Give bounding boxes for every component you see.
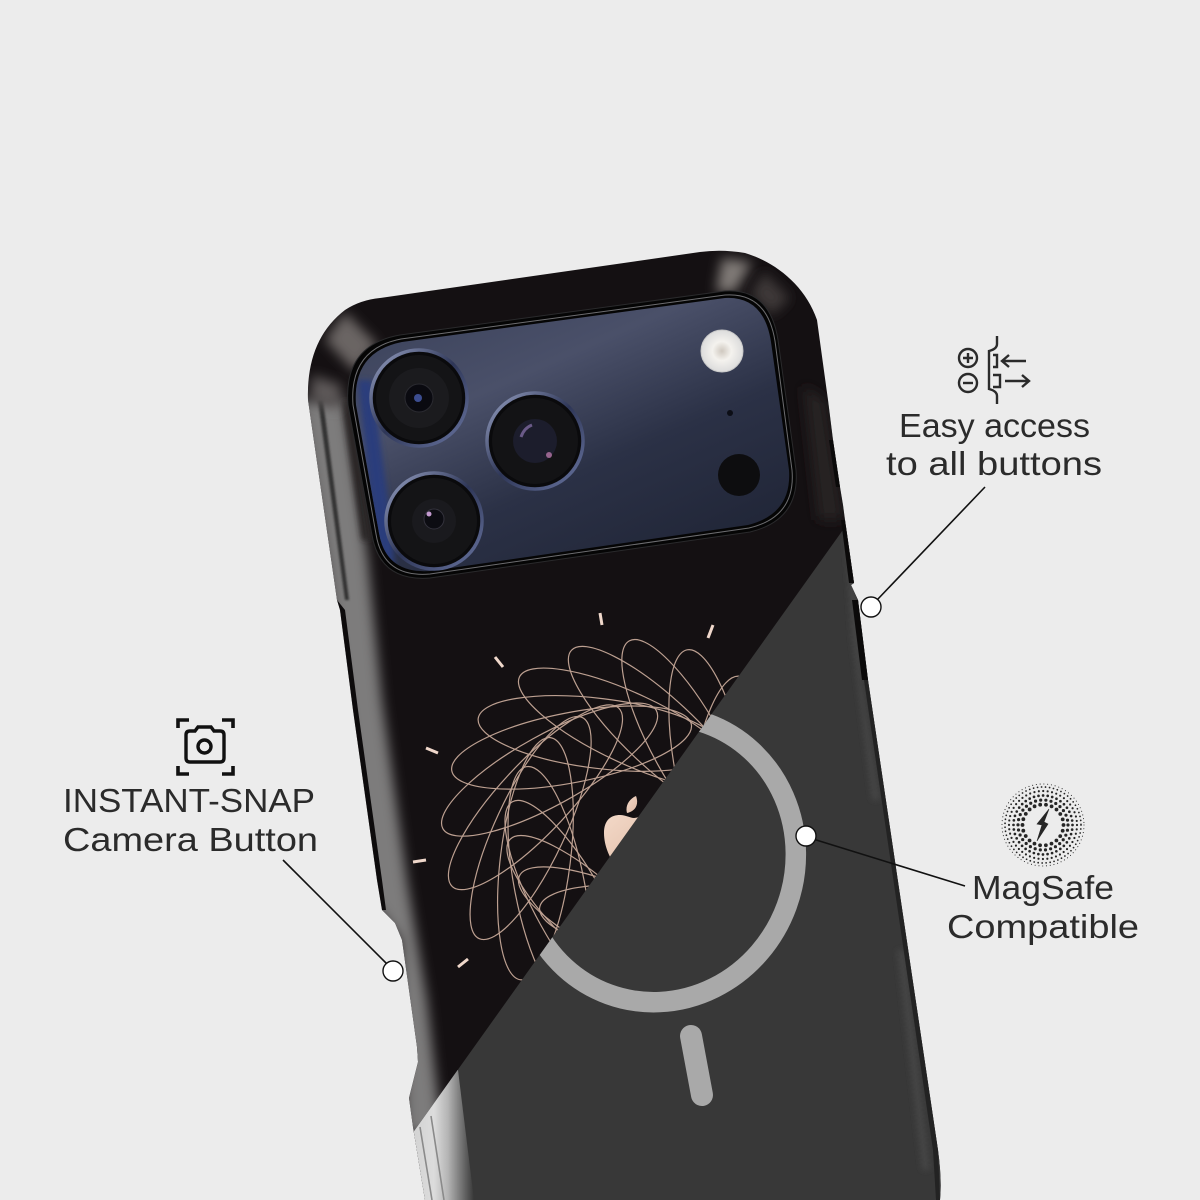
callout line xyxy=(877,487,985,600)
callout: camera button xyxy=(63,720,403,981)
MagSafe ring xyxy=(540,714,806,1012)
label: camera button: INSTANT-SNAP xyxy=(63,782,315,819)
label: camera button xyxy=(63,782,318,858)
label: MagSafe: MagSafe xyxy=(972,869,1114,906)
case body: grey lower section xyxy=(400,520,960,1200)
icon: camera xyxy=(178,720,233,774)
callout: MagSafe xyxy=(796,784,1139,945)
MagSafe alignment pill xyxy=(691,1036,702,1095)
callout line xyxy=(813,839,965,886)
microphone xyxy=(727,410,733,416)
callout dot xyxy=(861,597,881,617)
flash xyxy=(701,330,743,372)
icon: buttons xyxy=(959,336,1029,404)
label: MagSafe: Compatible xyxy=(947,908,1139,945)
lens middle xyxy=(487,393,583,489)
callout dot xyxy=(383,961,403,981)
label: easy access: to all buttons xyxy=(886,445,1102,482)
callout: easy access xyxy=(861,336,1102,617)
spirograph artwork xyxy=(440,638,739,980)
lens bottom xyxy=(386,473,482,569)
apple logo xyxy=(604,796,638,857)
side buttons xyxy=(829,440,868,680)
camera surround xyxy=(348,291,796,578)
phone case xyxy=(290,240,960,1200)
spirograph ticks xyxy=(413,613,713,967)
camera glass xyxy=(356,298,789,571)
label: easy access: Easy access xyxy=(899,407,1090,444)
left blue edge xyxy=(358,380,395,575)
case body: black upper section xyxy=(290,240,960,1200)
camera module xyxy=(348,291,796,578)
callout dot xyxy=(796,826,816,846)
LiDAR xyxy=(718,454,760,496)
label: easy access xyxy=(886,407,1102,482)
callout line xyxy=(283,860,387,964)
icon: MagSafe dots and bolt xyxy=(1002,784,1084,866)
label: MagSafe xyxy=(947,869,1139,945)
label: camera button: Camera Button xyxy=(63,821,318,858)
lens top xyxy=(371,350,467,446)
silver inner line xyxy=(353,295,792,574)
